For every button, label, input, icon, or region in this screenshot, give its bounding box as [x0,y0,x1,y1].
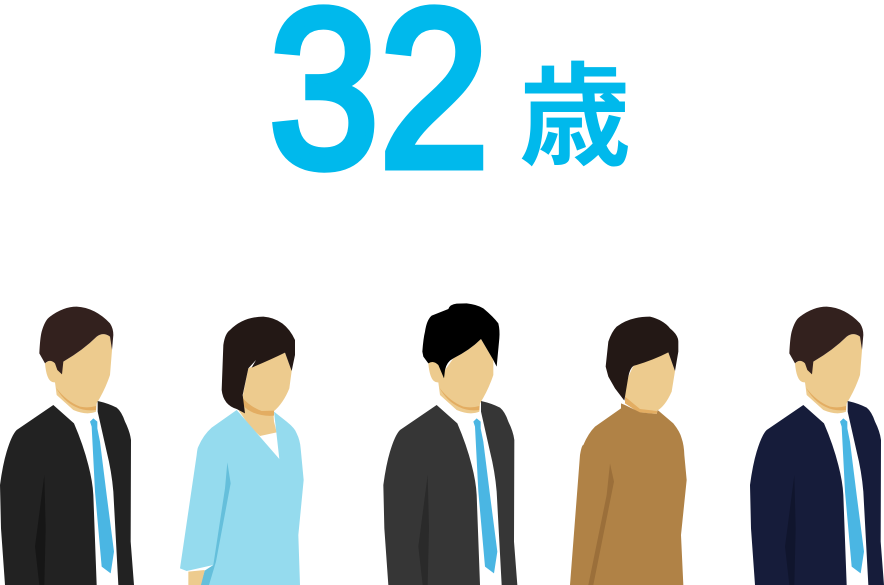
person 5: man in navy suit [750,307,884,585]
person 4: woman in brown sweater [570,317,687,585]
person 1: man in black suit [0,307,134,585]
unit: age kanji: 歳 [519,55,631,180]
person 3: man in charcoal suit [383,303,517,585]
person 2: woman in light blue top [180,317,304,585]
title: average age 32 [269,0,631,214]
